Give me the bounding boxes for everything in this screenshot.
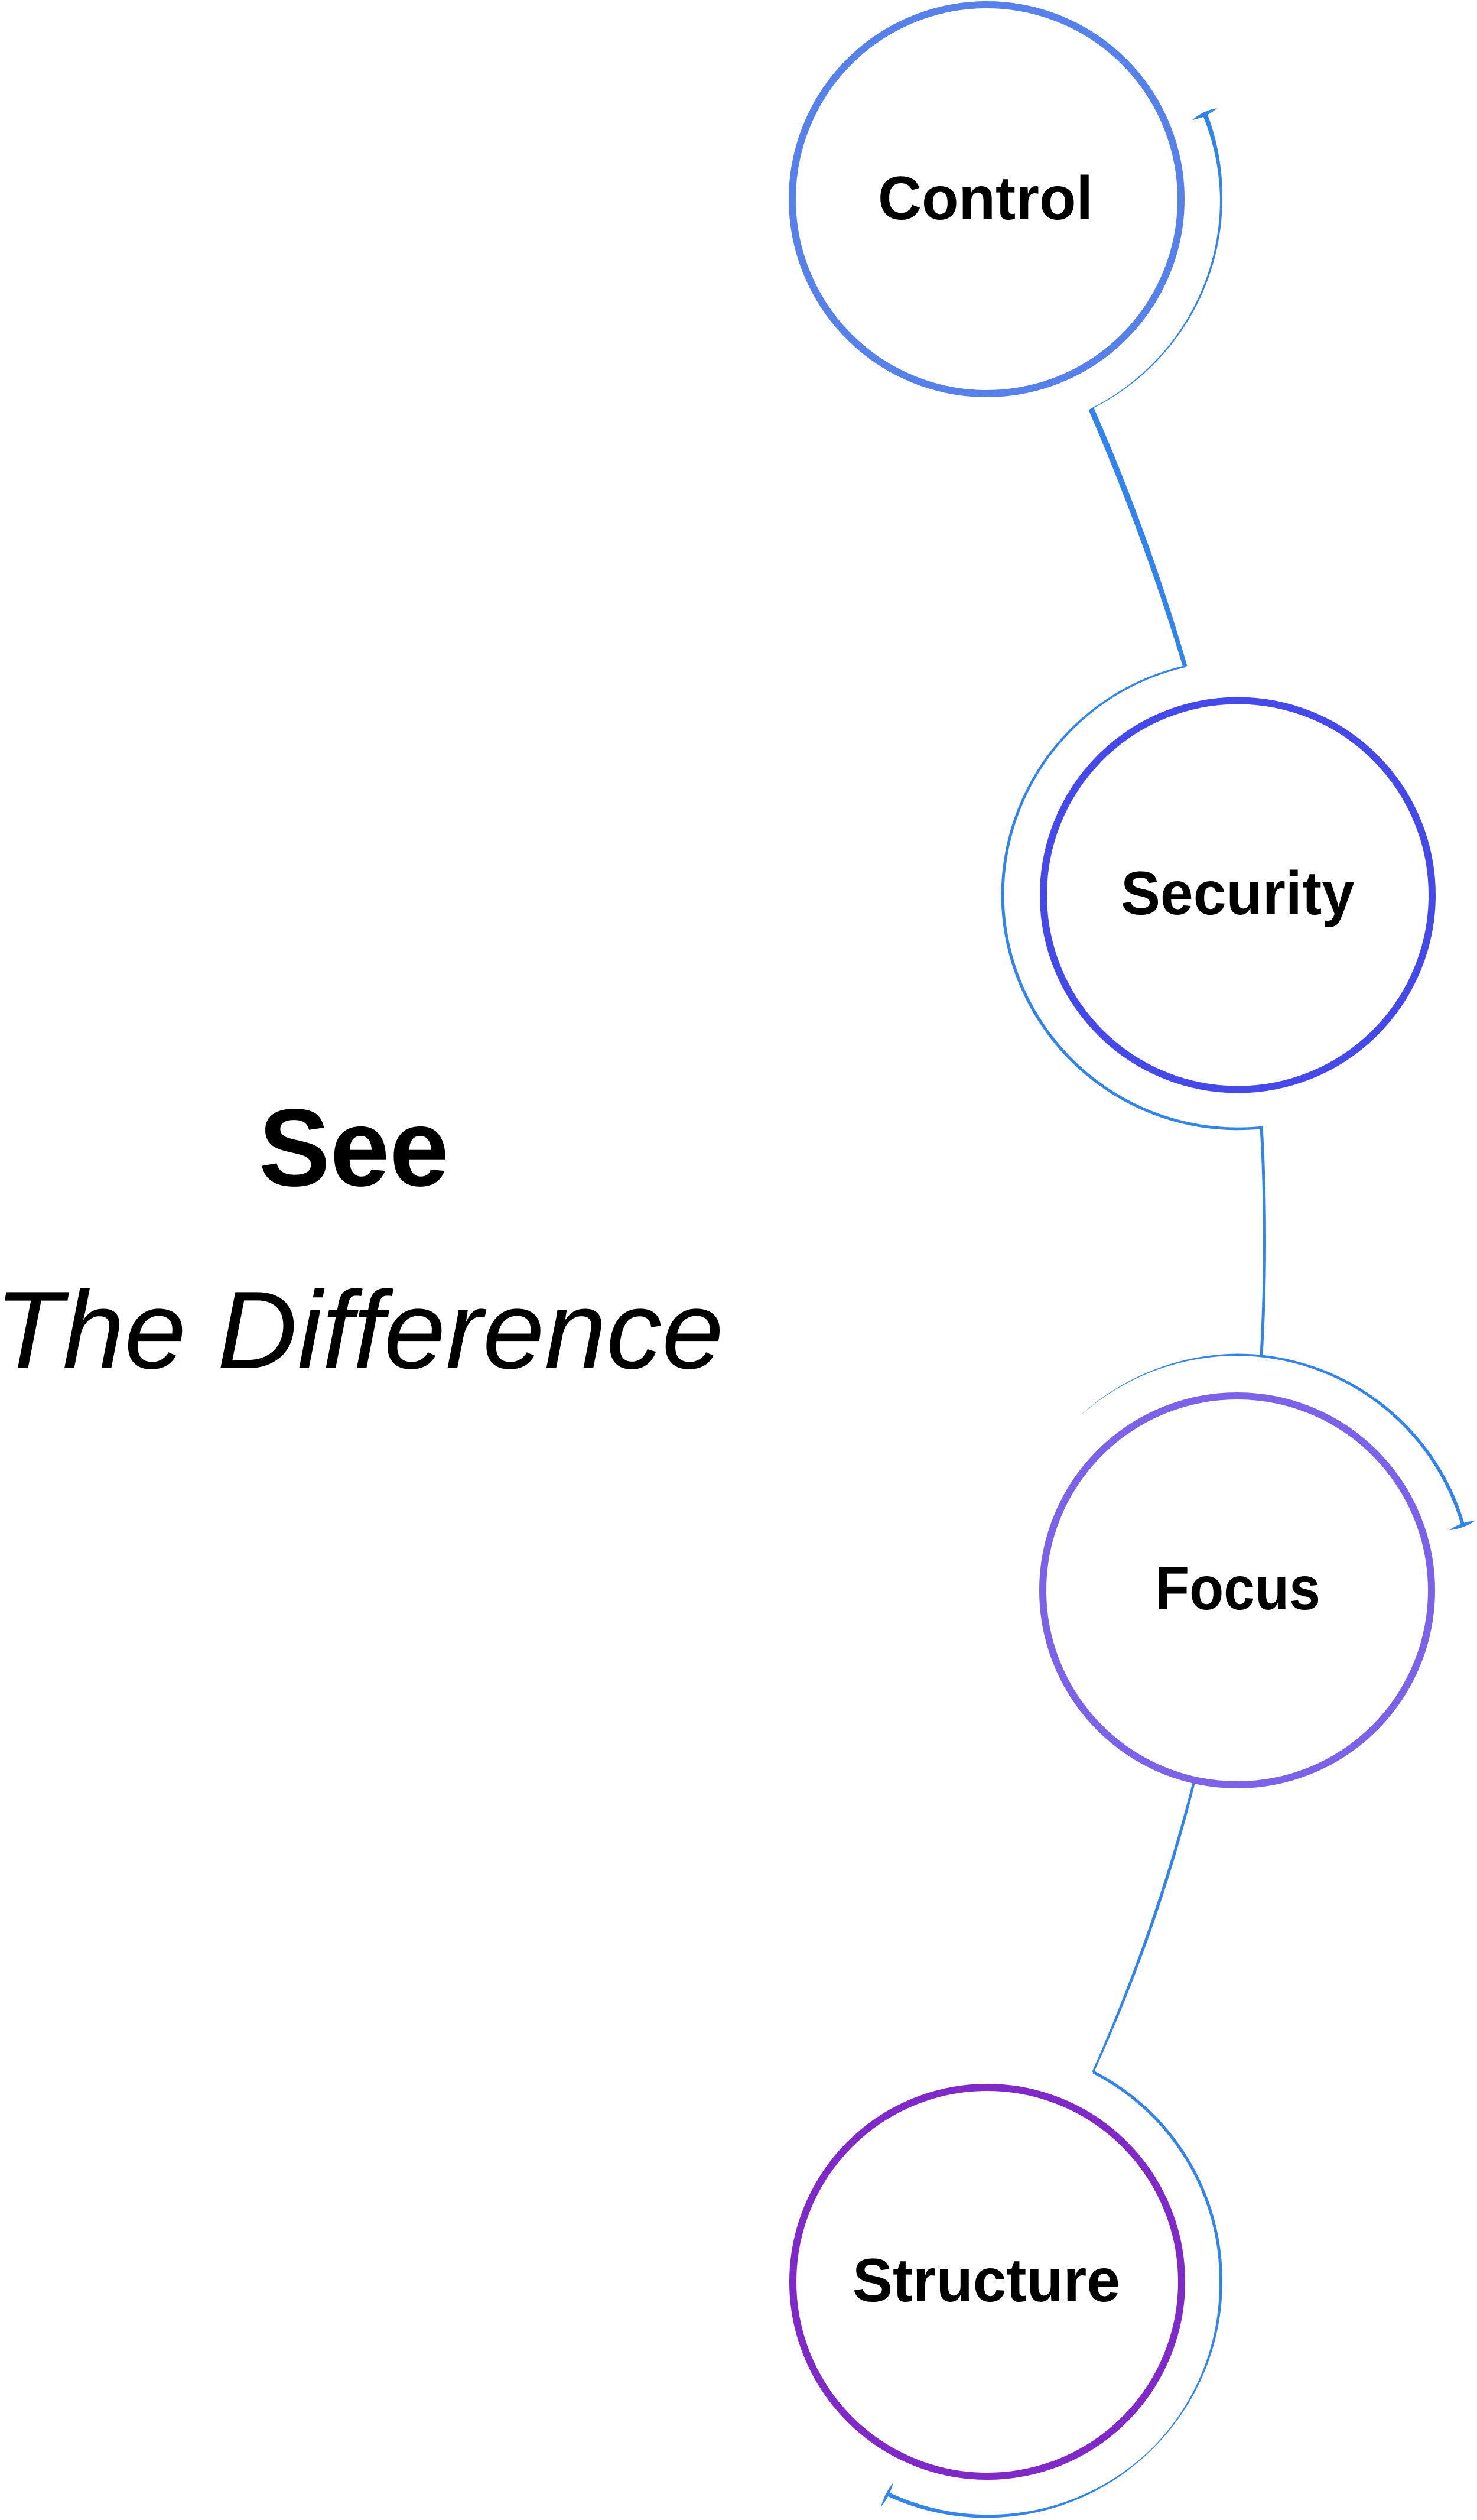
label: Structure: Structure — [853, 2246, 1120, 2315]
connector: Focus to Structure — [1092, 1781, 1195, 2073]
circle: Control — [792, 5, 1181, 394]
arc around Control — [1093, 113, 1222, 408]
connector: Control to Security — [1088, 407, 1188, 667]
arc around Focus — [1082, 1353, 1465, 1525]
node: Control — [792, 5, 1222, 408]
arc end tick: Structure — [881, 2483, 893, 2507]
node: Structure — [793, 2071, 1222, 2518]
label: Control: Control — [878, 164, 1093, 233]
connector: Security to Focus — [1260, 1126, 1266, 1355]
circle: Structure — [793, 2087, 1182, 2476]
label: Security: Security — [1121, 859, 1355, 928]
arc around Structure — [887, 2071, 1222, 2518]
arc end tick: Focus — [1449, 1521, 1475, 1530]
circle: Focus — [1043, 1396, 1432, 1785]
title: See: See — [259, 1087, 449, 1209]
node: Focus — [1043, 1353, 1475, 1785]
arc around Security — [1001, 665, 1263, 1130]
subtitle: The Difference: The Difference — [0, 1268, 724, 1392]
label: Focus: Focus — [1155, 1554, 1320, 1623]
title block — [0, 1087, 724, 1392]
node: Security — [1001, 665, 1432, 1130]
arc end tick: Control — [1192, 108, 1217, 120]
circle: Security — [1043, 701, 1432, 1090]
